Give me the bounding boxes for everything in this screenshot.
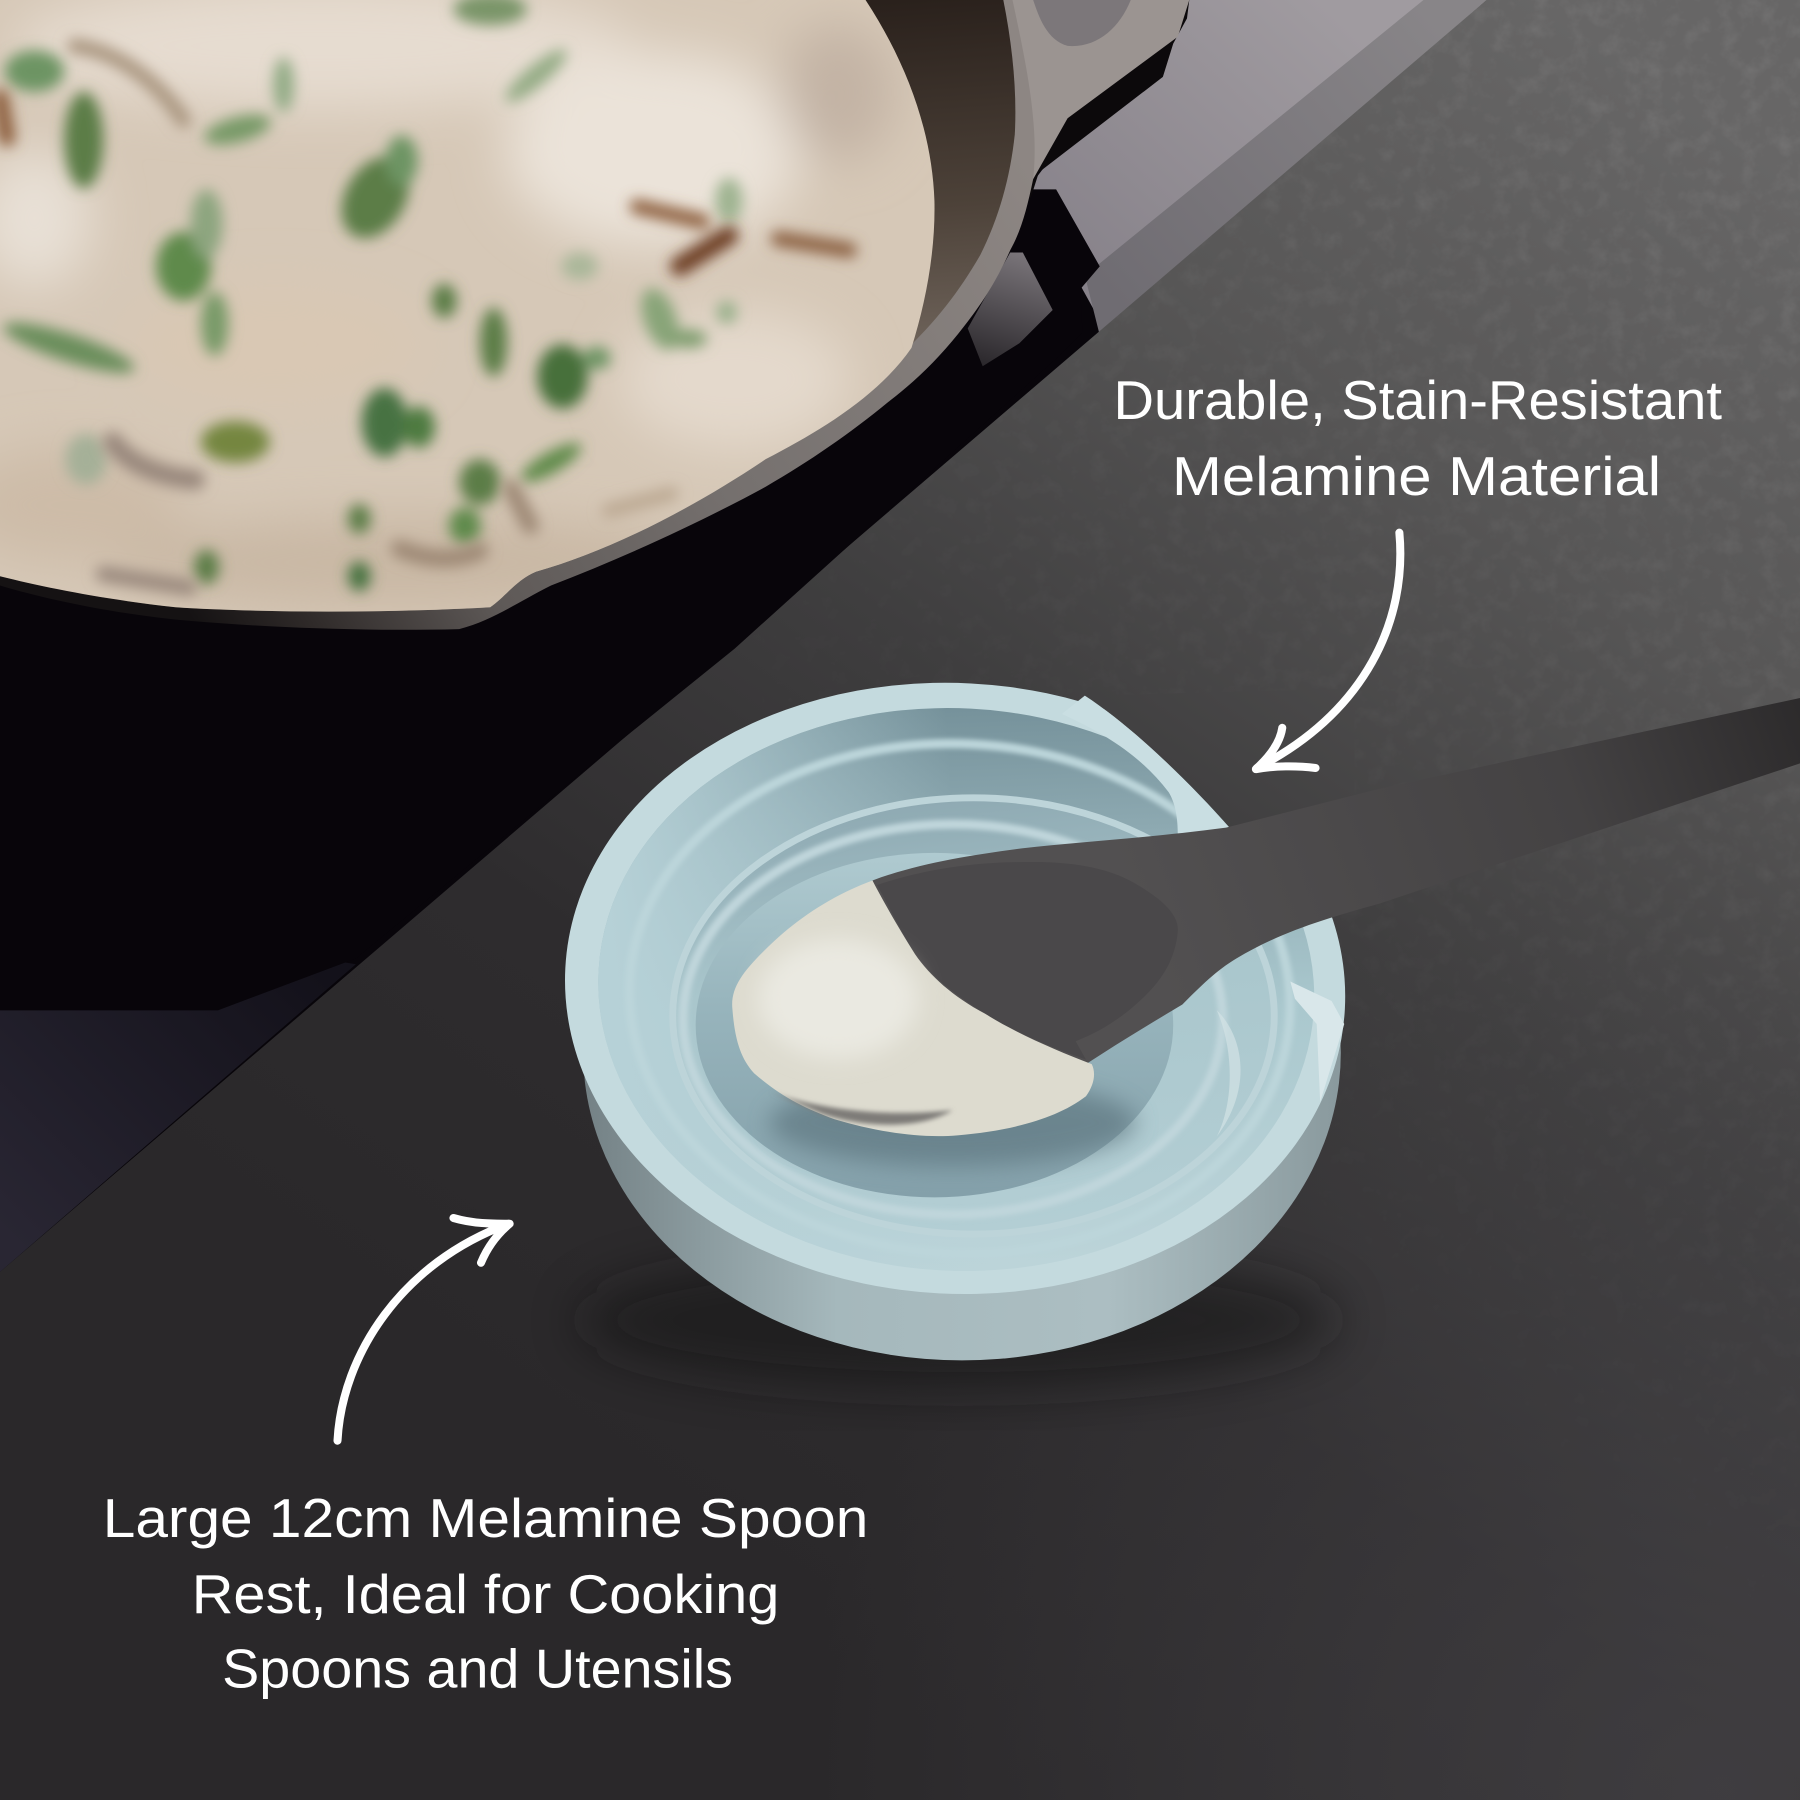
frying pan with creamy sauce (0, 0, 1189, 1010)
cream highlight (758, 939, 918, 1058)
mushrooms (0, 46, 849, 588)
dish rim (549, 663, 1361, 1314)
spoon (732, 698, 1800, 1136)
inner wall left highlight (584, 690, 1329, 1289)
arrow: material to dish (1256, 533, 1400, 769)
sauce (0, 0, 953, 620)
callout: material: Melamine Material (1172, 445, 1661, 507)
callout: size: Spoons and Utensils (222, 1638, 733, 1700)
second ring (683, 824, 1223, 1215)
notch cut (1085, 689, 1355, 838)
callout: material: Durable, Stain-Resistant (1114, 369, 1722, 431)
callout: size: Rest, Ideal for Cooking (192, 1563, 779, 1625)
callout: size (103, 1487, 868, 1700)
glossy reflection (1217, 1010, 1241, 1136)
arrow: size to dish (338, 1218, 510, 1441)
callout: material (1114, 369, 1722, 507)
glass panel lower left (0, 955, 356, 1272)
pan inner wall (804, 0, 1015, 413)
spoon rest dish (549, 663, 1361, 1389)
mat texture (1420, 14, 1800, 397)
cream on spoon (732, 880, 1094, 1136)
herbs (0, 0, 743, 591)
spoon handle and outer bowl (872, 698, 1800, 1064)
ring groove (616, 727, 1303, 1271)
rear lip at notch (1062, 696, 1231, 836)
inner ring (673, 798, 1274, 1234)
handle recess (1033, 0, 1131, 46)
spoon bowl (877, 862, 1178, 1060)
dish base (583, 745, 1341, 1360)
pan handle (999, 0, 1189, 197)
center well (696, 853, 1173, 1197)
cream shadow edge (770, 1092, 953, 1125)
dish shadow (580, 1251, 1337, 1389)
window under bracket (968, 253, 1053, 366)
shadow under spoon (769, 1079, 1136, 1166)
callout: size: Large 12cm Melamine Spoon (103, 1487, 868, 1549)
handle bracket (0, 189, 1100, 1010)
glass strip upper right (1027, 0, 1487, 335)
inner wall (584, 690, 1329, 1289)
pan rim (0, 0, 1035, 630)
front notch (1290, 982, 1344, 1102)
